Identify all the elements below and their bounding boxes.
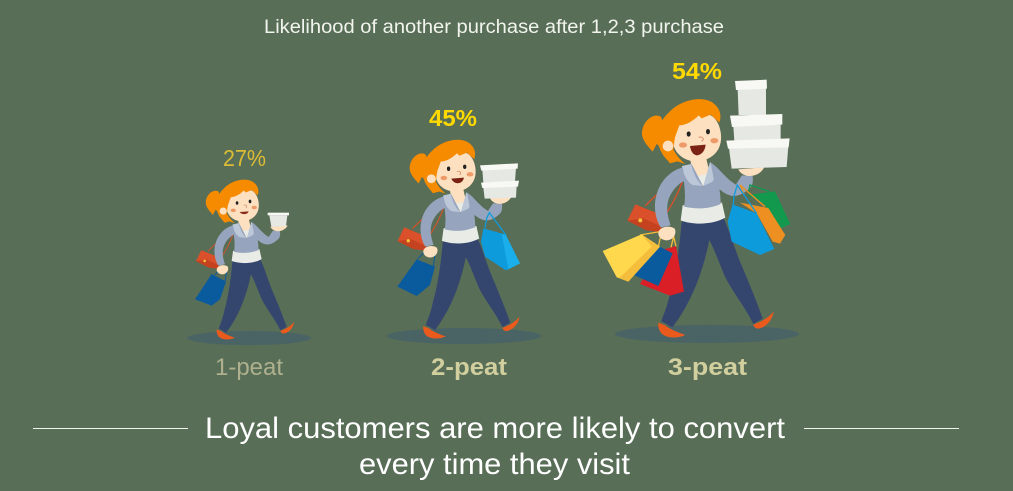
- mouth: [451, 178, 464, 183]
- shopping bag: light blue: [481, 213, 520, 270]
- shadow: 2-peat: [387, 328, 541, 344]
- figure: woman with one box: [196, 180, 294, 340]
- label: 3-peat: 3-peat: [668, 354, 747, 381]
- shopping bags: green, orange, blue: [728, 185, 790, 255]
- hand: [423, 246, 438, 257]
- boxes: [726, 80, 790, 169]
- conclusion text: [205, 412, 785, 481]
- figure: woman with three boxes: [627, 99, 774, 338]
- hand: [217, 265, 228, 274]
- label: 2-peat: 2-peat: [431, 354, 507, 381]
- boxes: [480, 163, 519, 199]
- conclusion text: Loyal customers are more likely to convert: [205, 412, 785, 445]
- figure: woman with two boxes: [397, 140, 519, 339]
- panel: 3-peat: [603, 58, 799, 381]
- percentage: 45%: 45%: [429, 105, 477, 131]
- panel: 1-peat: [187, 145, 311, 381]
- hand: [658, 227, 675, 240]
- percentage: 54%: 54%: [672, 58, 722, 84]
- shopping bag: blue: [195, 267, 227, 306]
- mouth: [240, 211, 249, 214]
- title: Likelihood of another purchase after 1,2,3 purchase: [264, 16, 724, 38]
- divider: left: [33, 428, 188, 429]
- shopping bag: dark blue: [397, 250, 435, 296]
- shadow: 3-peat: [615, 325, 799, 343]
- label: 1-peat: 1-peat: [215, 354, 283, 381]
- mouth: [690, 145, 706, 155]
- shadow: 1-peat: [187, 331, 311, 345]
- conclusion text: every time they visit: [359, 448, 630, 481]
- box: [268, 213, 289, 227]
- panel: 2-peat: [387, 105, 541, 381]
- percentage: 27%: 27%: [223, 145, 266, 171]
- divider: right: [804, 428, 959, 429]
- shopping bags: yellow, blue, red: [603, 232, 684, 296]
